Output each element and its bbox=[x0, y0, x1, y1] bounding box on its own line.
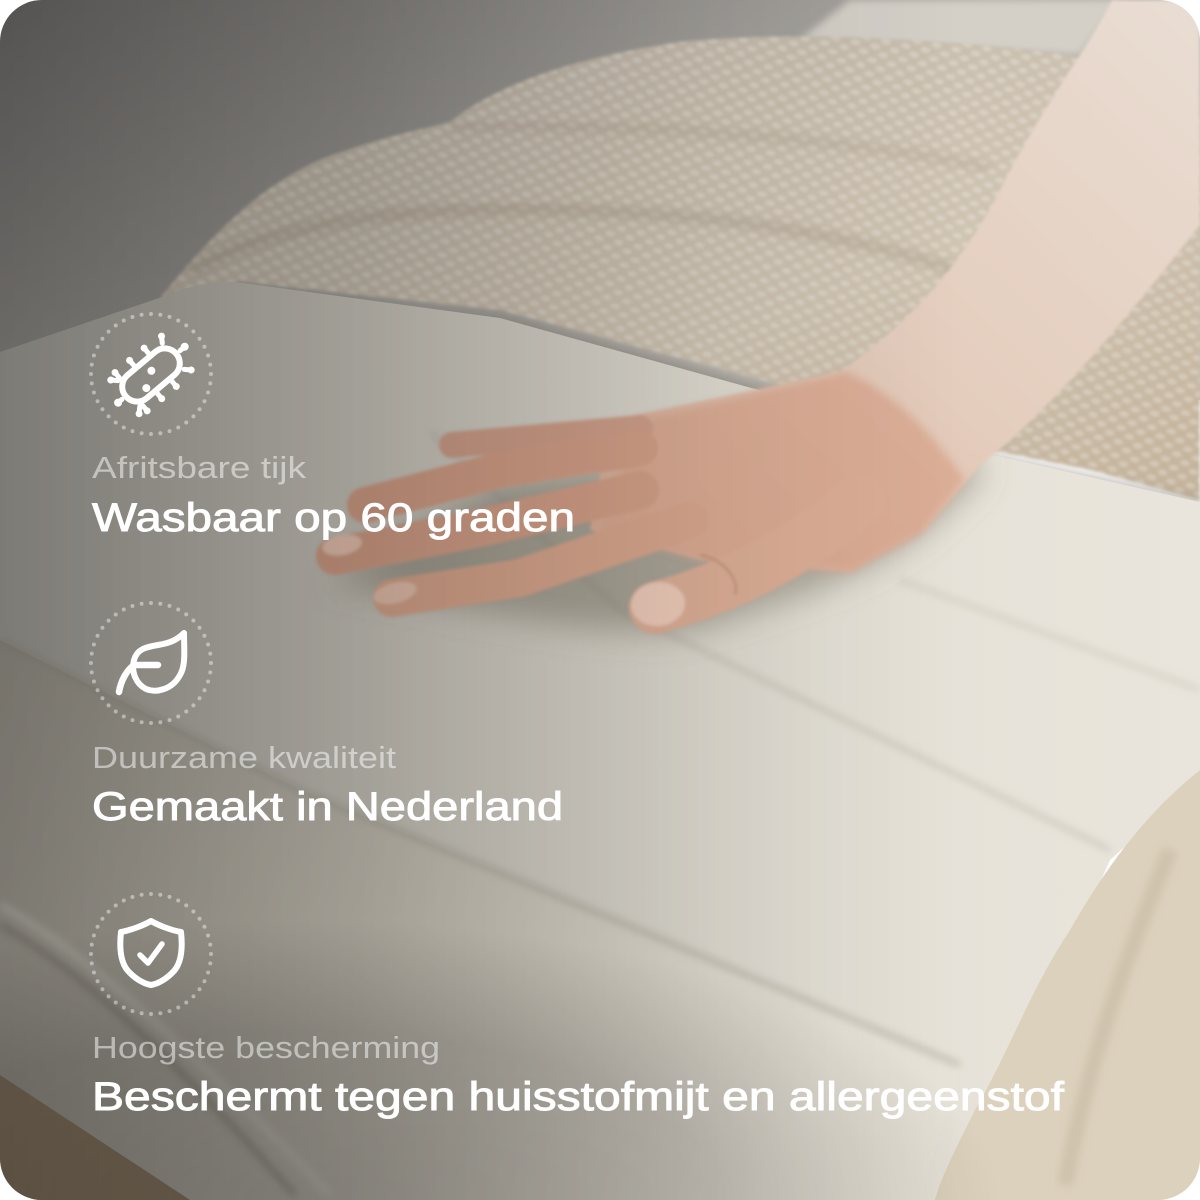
icon: shield with check in dotted circle bbox=[91, 894, 211, 1014]
blanket fold bbox=[1065, 850, 1170, 1185]
lower-left soft shade bbox=[0, 956, 940, 1200]
mattress seams bbox=[1, 581, 1196, 1195]
label: Duurzame kwaliteit: Duurzame kwaliteit bbox=[92, 740, 396, 775]
heading: Wasbaar op 60 graden: Wasbaar op 60 graden bbox=[92, 496, 575, 540]
feature: highest protection bbox=[91, 894, 1065, 1119]
feature: sustainable quality bbox=[91, 603, 563, 829]
hand shadow bbox=[340, 460, 992, 648]
arm and hand bbox=[321, 0, 1200, 628]
heading: Beschermt tegen huisstofmijt en allergeenstof: Beschermt tegen huisstofmijt en allergeenstof bbox=[92, 1075, 1065, 1119]
lower right blanket bbox=[935, 770, 1200, 1200]
icon: bacterium in dotted circle bbox=[91, 314, 211, 434]
pillow in background bbox=[800, 0, 1120, 55]
icon: leaf in dotted circle bbox=[91, 603, 211, 723]
knitted blanket bbox=[160, 37, 1200, 500]
heading: Gemaakt in Nederland: Gemaakt in Nederland bbox=[92, 785, 563, 829]
blanket shadow on mattress bbox=[466, 313, 1200, 502]
mattress top bbox=[0, 282, 1200, 1200]
floor bbox=[0, 1075, 190, 1200]
left dark overlay bbox=[0, 0, 826, 1200]
mattress side bbox=[0, 640, 245, 1200]
feature: washable cover bbox=[91, 314, 575, 540]
label: Afritsbare tijk: Afritsbare tijk bbox=[92, 450, 307, 485]
label: Hoogste bescherming: Hoogste bescherming bbox=[92, 1030, 440, 1065]
wall bbox=[0, 0, 1200, 400]
